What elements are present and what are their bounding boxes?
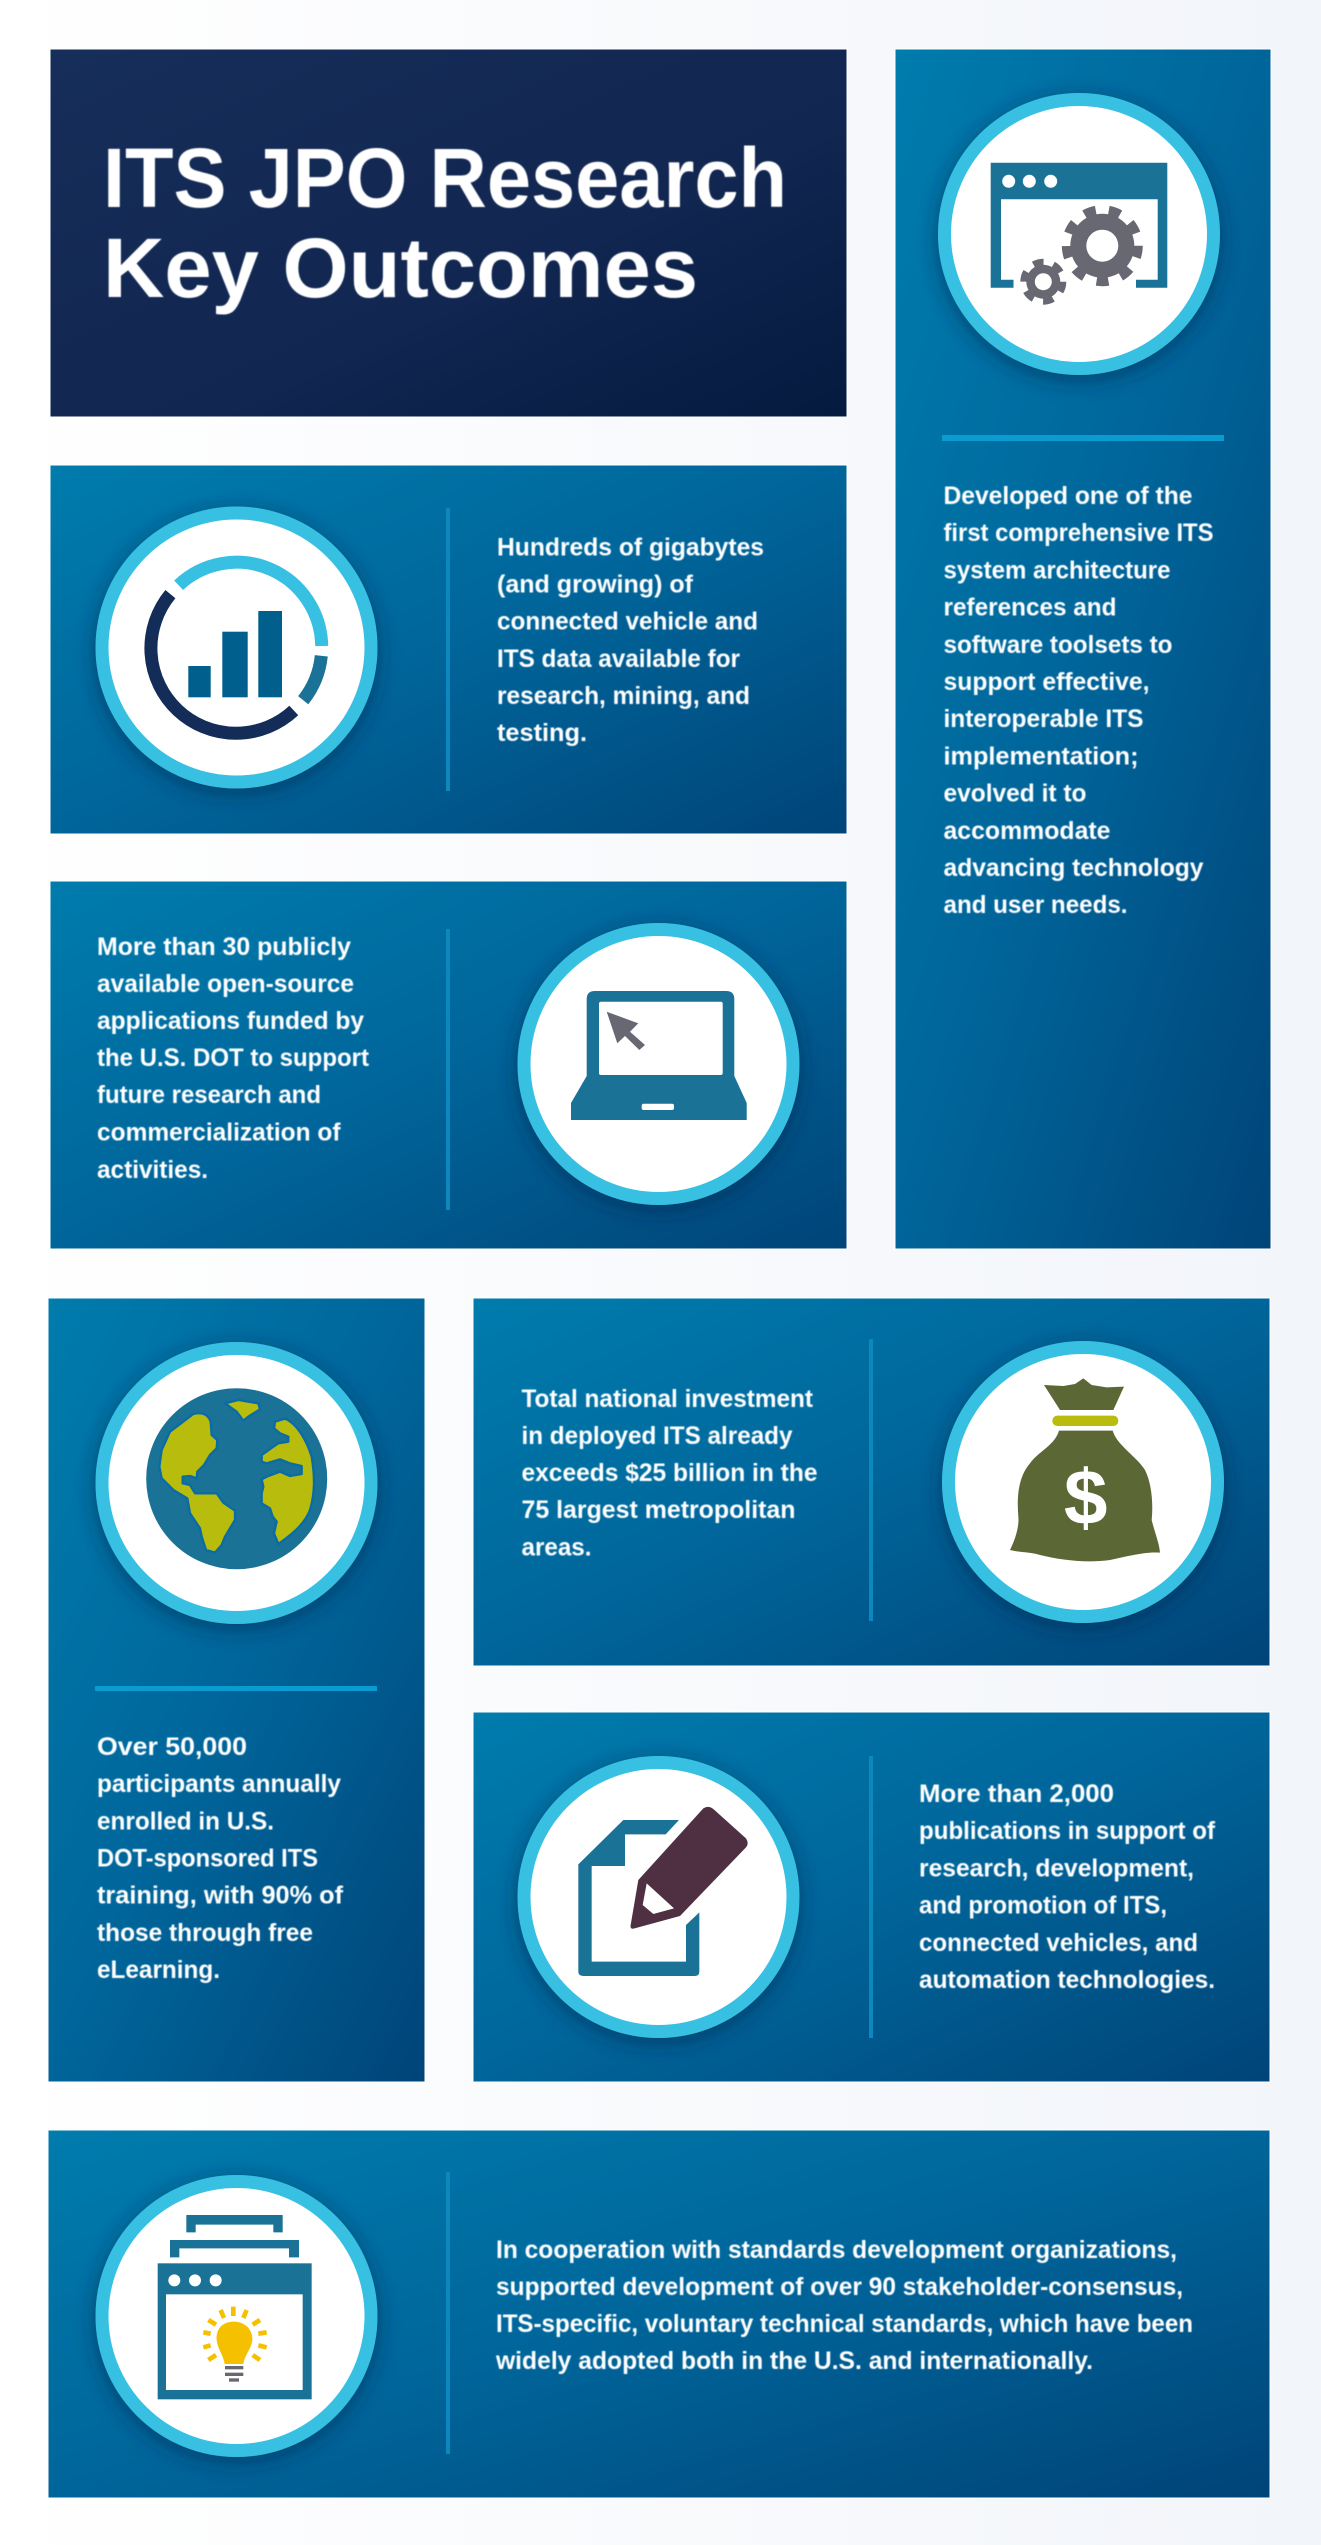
text: system architecture outcome: and user needs. <box>944 891 1128 919</box>
text: training participants outcome: participants annually <box>97 1770 341 1798</box>
heading: ITS JPO Research Key Outcomes: Key Outcomes <box>103 221 698 315</box>
text: publications outcome <box>919 1780 1216 1994</box>
text: system architecture outcome: support effective, <box>944 668 1150 696</box>
text: technical standards outcome <box>495 2236 1193 2375</box>
text: technical standards outcome: In cooperation with standards development organizations, <box>496 2236 1177 2264</box>
text: system architecture outcome: evolved it to <box>944 780 1086 808</box>
text: system architecture outcome <box>944 482 1214 919</box>
panel: connected vehicle data <box>50 465 847 834</box>
text: publications outcome: connected vehicles, and <box>919 1929 1198 1957</box>
text: training participants outcome: eLearning. <box>97 1956 220 1984</box>
text: system architecture outcome: first comprehensive ITS <box>944 519 1214 547</box>
text: national investment outcome: Total national investment <box>522 1385 814 1413</box>
text: training participants outcome <box>97 1733 344 1984</box>
text: system architecture outcome: Developed one of the <box>944 482 1193 510</box>
text: publications outcome: and promotion of ITS, <box>919 1892 1167 1920</box>
heading: ITS JPO Research Key Outcomes <box>103 131 787 315</box>
text: system architecture outcome: advancing technology <box>944 854 1204 882</box>
icon: money bag: $ <box>1064 1453 1107 1541</box>
panel: national investment <box>473 1298 1270 1666</box>
text: open-source applications outcome <box>97 933 370 1184</box>
icon: window with gears <box>944 100 1214 368</box>
panel: open-source applications <box>50 881 847 1249</box>
text: system architecture outcome: software toolsets to <box>944 631 1172 659</box>
text: training participants outcome: enrolled in U.S. <box>97 1808 274 1836</box>
icon: money bag <box>948 1348 1218 1616</box>
text: system architecture outcome: interoperable ITS <box>944 705 1144 733</box>
text: national investment outcome <box>522 1385 818 1562</box>
text: open-source applications outcome: More than 30 publicly <box>97 933 351 961</box>
text: national investment outcome: areas. <box>522 1534 592 1562</box>
panel: technical standards <box>48 2130 1270 2498</box>
icon: laptop with cursor <box>524 930 793 1198</box>
text: open-source applications outcome: commercialization of <box>97 1118 341 1146</box>
text: training participants outcome: DOT-sponsored ITS <box>97 1844 318 1872</box>
text: national investment outcome: 75 largest metropolitan <box>522 1496 796 1524</box>
text: training participants outcome: training, with 90% of <box>97 1882 344 1910</box>
text: connected vehicle data outcome: (and growing) of <box>497 570 694 598</box>
text: national investment outcome: in deployed ITS already <box>522 1422 793 1450</box>
text: national investment outcome: exceeds $25 billion in the <box>522 1459 818 1487</box>
text: publications outcome: publications in support of <box>919 1817 1216 1845</box>
icon: stacked windows with light bulb <box>102 2182 371 2450</box>
text: connected vehicle data outcome: Hundreds of gigabytes <box>497 534 764 562</box>
text: technical standards outcome: supported development of over 90 stakeholder-consensus, <box>496 2273 1183 2301</box>
panel: publications <box>473 1712 1270 2082</box>
text: open-source applications outcome: future research and <box>97 1081 321 1109</box>
text: open-source applications outcome: applications funded by <box>97 1007 364 1035</box>
text: system architecture outcome: accommodate <box>944 817 1111 845</box>
text: technical standards outcome: ITS-specific, voluntary technical standards, which have been <box>496 2310 1193 2338</box>
text: system architecture outcome: implementation; <box>944 742 1138 770</box>
icon: data chart in ring <box>102 513 371 782</box>
icon: globe <box>102 1348 371 1618</box>
text: publications outcome: automation technologies. <box>919 1966 1215 1994</box>
panel: title <box>50 49 847 417</box>
text: connected vehicle data outcome: ITS data available for <box>497 645 740 673</box>
text: connected vehicle data outcome: connected vehicle and <box>497 608 758 636</box>
heading: ITS JPO Research Key Outcomes: ITS JPO Research <box>103 131 787 225</box>
text: open-source applications outcome: the U.S. DOT to support <box>97 1044 370 1072</box>
panel: system architecture <box>895 49 1271 1249</box>
text: connected vehicle data outcome: research, mining, and <box>497 682 750 710</box>
panel: training participants <box>48 1298 425 2082</box>
icon: document and pencil <box>524 1762 793 2032</box>
text: system architecture outcome: references and <box>944 594 1116 622</box>
text: connected vehicle data outcome: testing. <box>497 719 587 747</box>
text: publications outcome: research, development, <box>919 1854 1194 1882</box>
text: publications outcome: More than 2,000 <box>919 1780 1114 1808</box>
text: connected vehicle data outcome <box>497 534 764 747</box>
text: training participants outcome: those through free <box>97 1919 313 1947</box>
text: open-source applications outcome: available open-source <box>97 970 354 998</box>
text: system architecture outcome: system architecture <box>944 556 1171 584</box>
text: training participants outcome: Over 50,000 <box>97 1733 247 1761</box>
text: open-source applications outcome: activities. <box>97 1156 208 1184</box>
text: technical standards outcome: widely adopted both in the U.S. and internationally. <box>495 2347 1093 2375</box>
